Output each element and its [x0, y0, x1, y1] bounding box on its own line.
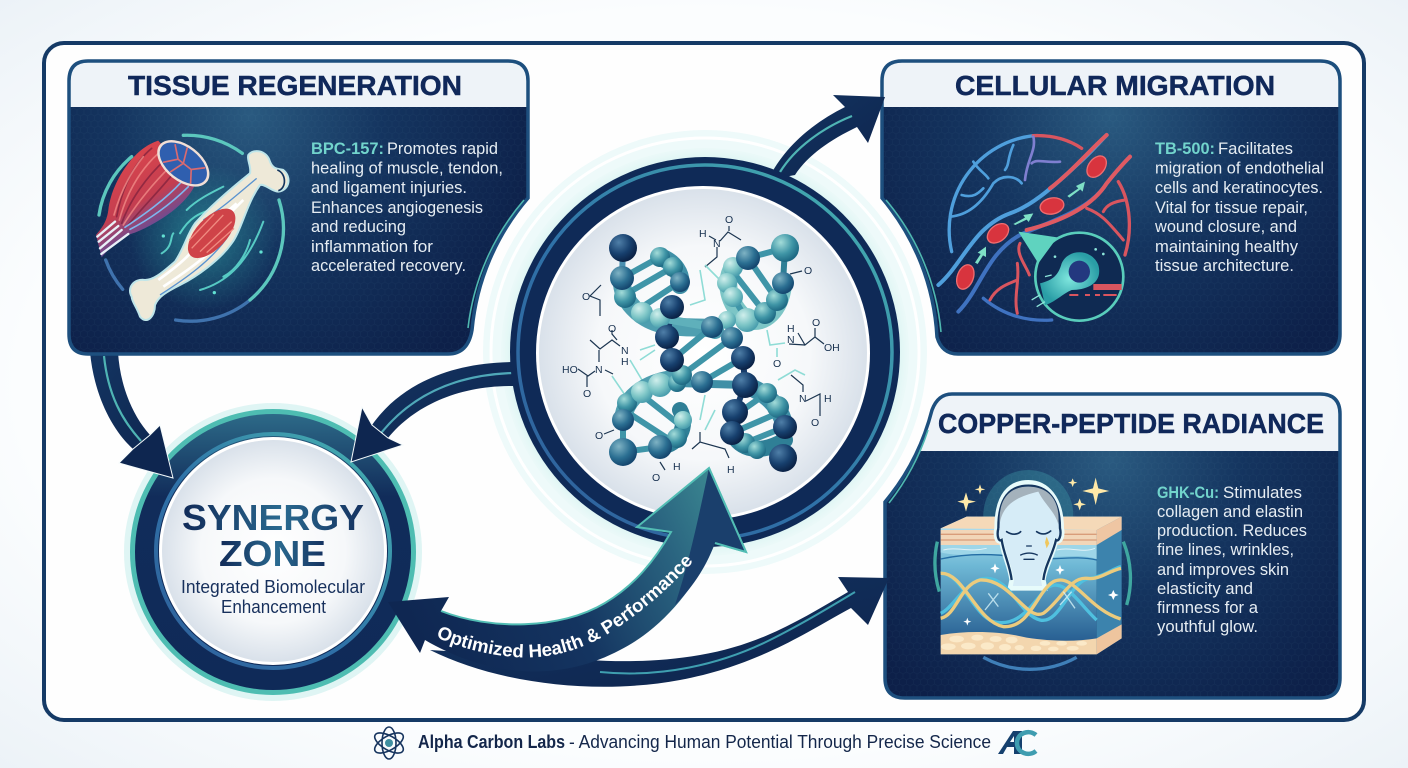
molecular chemistry labels: H — [727, 464, 735, 476]
molecular chemistry labels: N — [595, 364, 603, 376]
arrow: tips overlapping synergy ring — [119, 407, 403, 478]
molecular chemistry labels: H — [621, 356, 629, 368]
text block: GHK-Cu: GHK-Cu: — [1157, 484, 1219, 502]
subtitle: integrated biomolecular enhancement: Integrated Biomolecular — [181, 577, 365, 597]
molecular chemistry labels: H — [699, 228, 707, 240]
panel: cellular migration — [880, 61, 1342, 357]
text block: TB-500 — [1154, 140, 1324, 275]
footer text: Alpha Carbon Labs — [418, 732, 565, 752]
text block: GHK-Cu: fine lines, wrinkles, — [1157, 541, 1294, 559]
text block: TB-500: migration of endothelial — [1155, 160, 1324, 178]
molecular chemistry labels: OH — [824, 342, 840, 354]
subtitle: integrated biomolecular enhancement: Enhancement — [221, 597, 326, 617]
arrow: core to synergy zone — [351, 362, 515, 462]
molecular chemistry labels: O — [811, 417, 819, 429]
text block: TB-500: tissue architecture. — [1155, 257, 1294, 275]
molecular chemistry labels: H — [824, 393, 832, 405]
text block: TB-500: wound closure, and — [1154, 218, 1297, 236]
molecular chemistry labels: O — [812, 317, 820, 329]
text block: BPC-157: Promotes rapid — [387, 140, 498, 158]
heading: copper-peptide radiance: COPPER-PEPTIDE RADIANCE — [938, 408, 1324, 439]
molecular chemistry labels: O — [582, 291, 590, 303]
text block: BPC-157: and reducing — [311, 218, 406, 236]
heading: synergy zone: SYNERGY — [182, 497, 364, 538]
synergy zone ring — [124, 403, 422, 701]
text block: TB-500: maintaining healthy — [1155, 238, 1299, 256]
molecular chemistry labels: O — [725, 214, 733, 226]
text block: GHK-Cu: youthful glow. — [1157, 618, 1258, 636]
heading: tissue regeneration: TISSUE REGENERATION — [128, 70, 462, 101]
heading: zone: ZONE — [219, 533, 326, 574]
footer — [372, 727, 1036, 759]
icon: blood vessels and migrating cell — [938, 135, 1130, 321]
text block: BPC-157: accelerated recovery. — [311, 257, 466, 275]
text block: TB-500: TB-500: — [1155, 140, 1215, 158]
arrow: core to cellular migration — [768, 95, 885, 180]
icon: atom logo — [372, 727, 406, 759]
text block: TB-500: Vital for tissue repair, — [1155, 199, 1308, 217]
panel: tissue regeneration — [69, 61, 529, 357]
subtitle: integrated biomolecular enhancement — [181, 577, 365, 617]
text block: TB-500: cells and keratinocytes. — [1155, 179, 1323, 197]
arrow: tissue regeneration to synergy zone — [90, 352, 173, 478]
molecular chemistry labels: O — [652, 472, 660, 484]
central ring glow — [483, 130, 927, 574]
arrow: synergy to copper-peptide radiance — [430, 577, 889, 687]
arrow: optimized health and performance — [396, 466, 748, 668]
text block: TB-500: Facilitates — [1218, 140, 1293, 158]
molecular chemistry labels — [562, 214, 840, 484]
molecular chemistry labels: O — [583, 388, 591, 400]
molecular chemistry labels: N — [787, 334, 795, 346]
text block: BPC-157: Enhances angiogenesis — [311, 199, 483, 217]
central molecular ring — [510, 157, 900, 547]
text block: BPC-157: healing of muscle, tendon, — [311, 160, 503, 178]
molecular chemistry labels: O — [804, 265, 812, 277]
DNA helix molecule — [609, 234, 799, 472]
text block: BPC-157: and ligament injuries. — [311, 179, 467, 197]
text block: GHK-Cu: firmness for a — [1157, 599, 1259, 617]
molecular chemistry labels: O — [608, 323, 616, 335]
molecular chemistry labels: N — [799, 393, 807, 405]
text block: BPC-157: inflammation for — [311, 238, 434, 256]
text block: BPC-157 — [311, 140, 503, 275]
text block: GHK-Cu: collagen and elastin — [1157, 503, 1303, 521]
icon: AC logo — [998, 731, 1036, 754]
footer tagline: - Advancing Human Potential Through Precise Science — [569, 732, 991, 752]
molecular chemistry labels: O — [773, 358, 781, 370]
molecular chemistry labels: H — [787, 323, 795, 335]
molecular chemistry labels: O — [595, 430, 603, 442]
text block: GHK-Cu: Stimulates — [1223, 484, 1302, 502]
text block: BPC-157: BPC-157: — [311, 140, 384, 158]
arrow label: Optimized Health & Performance — [438, 556, 692, 658]
molecular chemistry labels: N — [621, 345, 629, 357]
molecular chemistry labels: H — [673, 461, 681, 473]
panel: copper-peptide radiance — [880, 392, 1342, 701]
icon: skin layers and glowing face — [935, 470, 1130, 669]
molecular chemistry labels: HO — [562, 364, 578, 376]
text block: GHK-Cu: production. Reduces — [1157, 522, 1307, 540]
heading: cellular migration: CELLULAR MIGRATION — [955, 70, 1275, 101]
text block: GHK-Cu: and improves skin — [1157, 561, 1289, 579]
text block: GHK-Cu: elasticity and — [1157, 580, 1253, 598]
text block: GHK-Cu — [1157, 484, 1307, 636]
molecular chemistry labels: N — [713, 238, 721, 250]
icon: muscle and bone — [96, 131, 289, 321]
